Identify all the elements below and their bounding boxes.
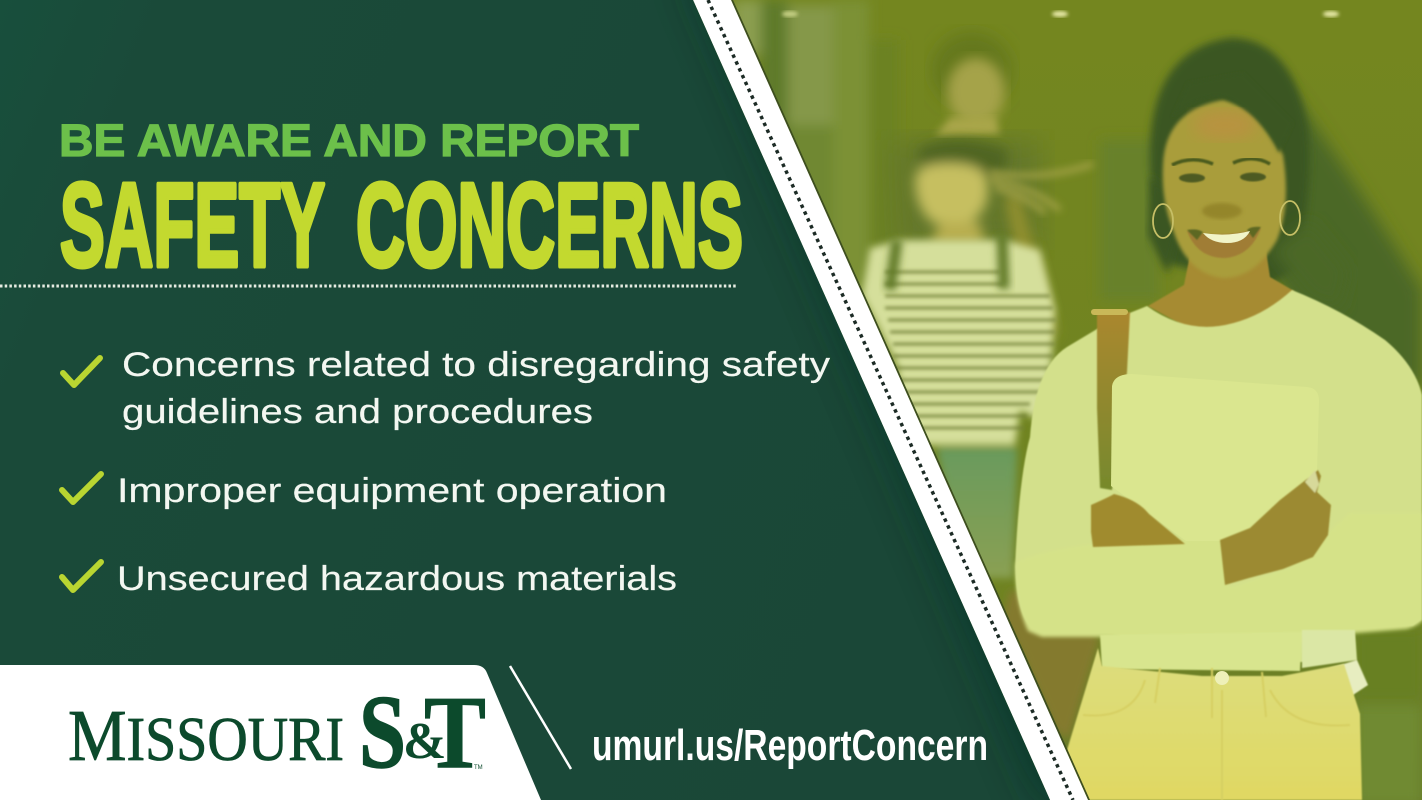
main heading [60,159,743,292]
item 1: guidelines and procedures [122,393,593,431]
item 1 [63,346,830,431]
nose and smile [1202,203,1242,219]
backpack [1002,590,1099,740]
checklist [62,346,830,598]
diagonal accent line [510,666,571,769]
dotted diagonal line [708,0,1073,800]
crossed hands [1091,470,1331,585]
item 3: Unsecured hazardous materials [117,560,677,598]
logo: Missouri S&T wordmark: T [424,675,486,790]
logo: Missouri S&T wordmark [68,673,486,790]
blurred boy in background [890,32,1040,250]
logo: Missouri S&T wordmark: S [359,673,406,790]
bag strap [1097,312,1130,490]
icon: check 2 [62,474,101,502]
photo: student holding a tablet in a hallway [690,0,1422,800]
hair fringe [1172,73,1293,153]
logo: Missouri S&T wordmark: TM [474,765,483,771]
item 1: Concerns related to disregarding safety [122,346,830,384]
main heading: CONCERNS [356,159,743,292]
hoop earrings [1153,204,1173,238]
logo: Missouri S&T wordmark: MISSOURI [68,695,344,776]
icon: check 3 [62,562,101,590]
item 2: Improper equipment operation [117,472,667,510]
main heading: SAFETY [60,159,325,292]
dotted divider [0,284,736,288]
long dark hair [1148,38,1422,390]
diagonal white band [693,0,1090,800]
face and neck [1148,73,1300,328]
white sweatshirt [1015,290,1422,695]
panel: dark green background [690,0,1050,800]
tablet [1111,374,1319,541]
folded forearm [1016,513,1422,637]
eyebrows and eyes [1172,159,1270,165]
eyebrow heading: BE AWARE AND REPORT [59,115,639,166]
yellow pants [1065,648,1362,800]
ceiling lights [782,11,1339,17]
hallway background [733,0,1422,800]
title block [59,115,743,292]
logo panel [0,665,541,800]
logo: Missouri S&T wordmark: & [403,713,446,770]
blurred girl in striped shirt [862,140,1093,578]
icon: check 1 [63,358,100,385]
website URL: umurl.us/ReportConcern [592,721,988,770]
